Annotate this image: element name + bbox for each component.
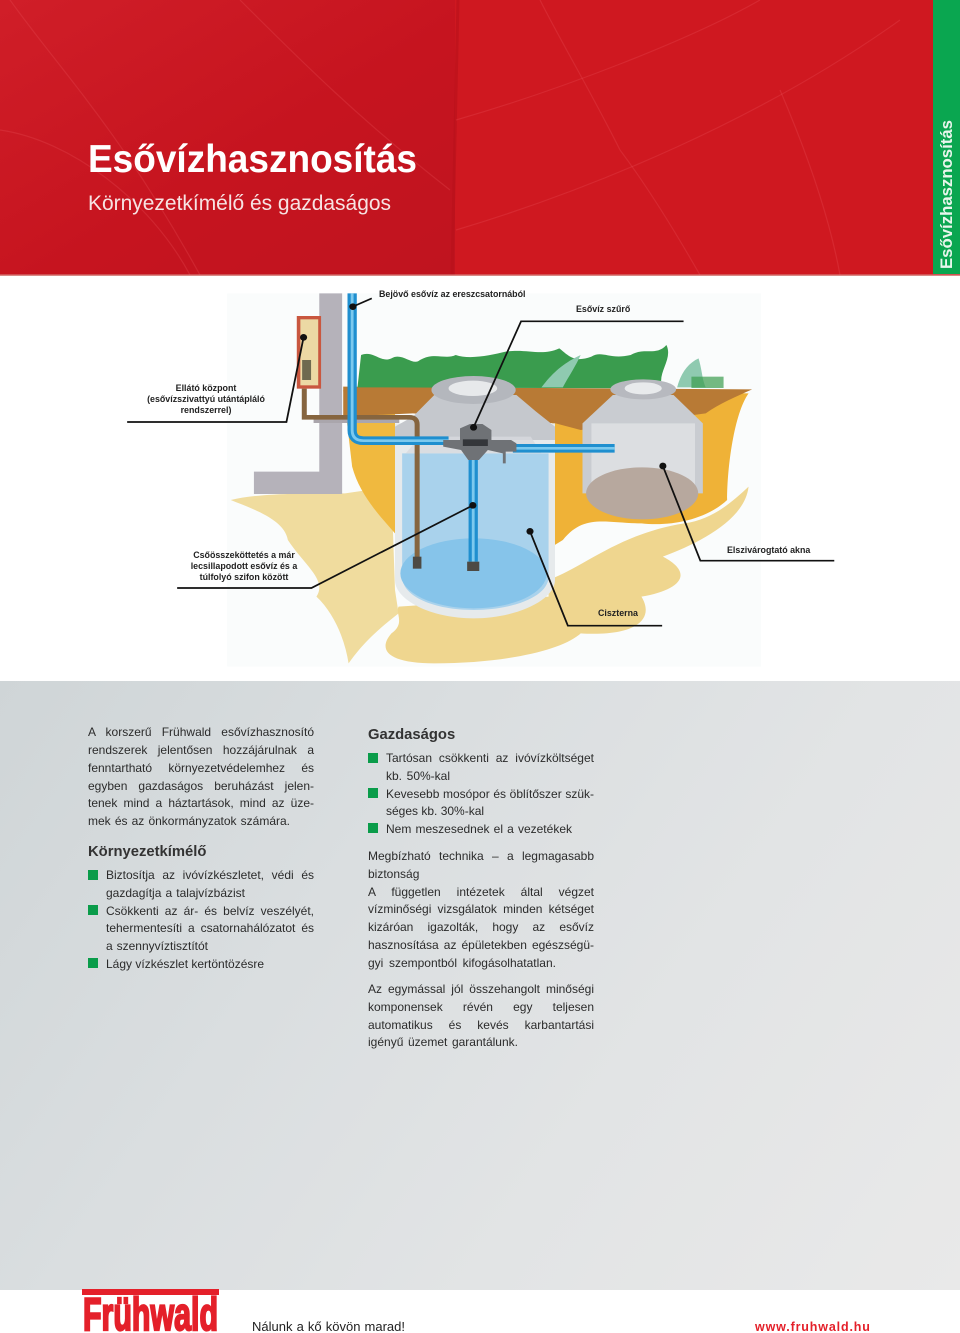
- paragraph: reliable technology: A független intézetek által végzet: [368, 885, 594, 899]
- heading: environment friendly: Környezetkímélő: [88, 844, 206, 860]
- orange soil: [343, 390, 395, 533]
- paragraph: maintenance: igényű üzemet garantálunk.: [368, 1035, 518, 1049]
- paragraph: maintenance: [368, 982, 594, 1049]
- bullet list: environment friendly: Lágy vízkészlet kertöntözésre: [106, 957, 264, 971]
- paragraph: reliable technology: biztonság: [368, 867, 419, 881]
- paragraph: reliable technology: hasznosítása az épületekben egészségü-: [368, 938, 594, 952]
- label: pipe connection: [191, 550, 298, 582]
- paragraph: reliable technology: kizáróan igazolták, hogy az esővíz: [368, 920, 594, 934]
- paragraph: maintenance: komponensek révén egy teljesen: [368, 1000, 594, 1014]
- grey text panel background: [0, 681, 960, 1290]
- sand: [231, 487, 399, 663]
- subtitle: Környezetkímélő és gazdaságos: [88, 192, 391, 215]
- label: supply centre: rendszerrel): [181, 405, 231, 415]
- paragraph: reliable technology: vízminőségi vizsgálatok minden kétséget: [368, 902, 594, 916]
- bullet list: environment friendly: Biztosítja az ivóvízkészletet, védi és: [106, 868, 314, 882]
- bullet list: economical: Tartósan csökkenti az ivóvízköltséget: [386, 751, 594, 765]
- heading: economical: Gazdaságos: [368, 727, 455, 743]
- title: Esővízhasznosítás: [88, 138, 417, 181]
- supply control box: [297, 316, 321, 389]
- intro paragraph: tenek mind a háztartások, mind az üze-: [88, 796, 314, 810]
- bullet list: environment friendly: a szennyvíztisztítót: [106, 939, 208, 953]
- intro paragraph: [88, 725, 314, 828]
- label: supply centre: (esővízszivattyú utántápláló: [147, 394, 265, 404]
- bullet list: economical: Nem meszesednek el a vezetékek: [386, 822, 572, 836]
- blue rainwater pipes: [352, 293, 615, 562]
- rain tank: [395, 376, 555, 618]
- paragraph: reliable technology: [368, 849, 594, 970]
- bullet list: environment friendly: Csökkenti az ár- és belvíz veszélyét,: [106, 904, 314, 918]
- building wall: [254, 293, 342, 494]
- label: pipe connection: túlfolyó szifon között: [200, 572, 288, 582]
- bullet list: environment friendly: gazdagítja a talajvízbázist: [106, 886, 245, 900]
- paragraph: reliable technology: Megbízható technika – a legmagasabb: [368, 849, 594, 863]
- paragraph: maintenance: Az egymással jól összehangolt minőségi: [368, 982, 594, 996]
- text column: right: [368, 727, 594, 1049]
- side tab: green strip with rotated title: Esővízhasznosítás: [938, 120, 956, 269]
- label: infiltration shaft: Elszivárogtató akna: [727, 545, 810, 555]
- text column: left: [88, 725, 314, 971]
- diagram background: [227, 293, 761, 667]
- diagram: rainwater cistern system: [127, 293, 834, 664]
- label: incoming rainwater: Bejövő esővíz az ereszcsatornából: [379, 289, 526, 299]
- label: rain filter: Esővíz szűrő: [576, 304, 630, 314]
- rain filter: [443, 424, 516, 463]
- bullet list: economical: séges kb. 30%-kal: [386, 804, 484, 818]
- side tab: green strip with rotated title: [933, 0, 960, 274]
- bullet list: economical: kb. 50%-kal: [386, 769, 450, 783]
- infiltration shaft: [582, 379, 703, 519]
- paragraph: reliable technology: gyi szempontból kifogásolhatatlan.: [368, 956, 556, 970]
- bullet list: environment friendly: tehermentesíti a csatornahálózatot és: [106, 921, 314, 935]
- label: supply centre: [147, 383, 265, 415]
- paragraph: maintenance: automatikus és kevés karbantartási: [368, 1018, 594, 1032]
- label: cistern: Ciszterna: [598, 608, 638, 618]
- plants: [357, 345, 668, 388]
- bullet list: economical: Kevesebb mosópor és öblítőszer szük-: [386, 787, 594, 801]
- intro paragraph: mek és az önkormányzatok számára.: [88, 814, 290, 828]
- label: supply centre: Ellátó központ: [176, 383, 236, 393]
- intro paragraph: A korszerű Frühwald esővízhasznosító: [88, 725, 314, 739]
- label: pipe connection: lecsillapodott esővíz és a: [191, 561, 297, 571]
- leader lines: [127, 298, 834, 626]
- bullet list: economical: [368, 751, 594, 836]
- brown overflow pipe: [304, 389, 417, 560]
- header band: red leaf background: [0, 0, 960, 276]
- intro paragraph: egyben gazdaságos beruházást jelen-: [88, 779, 314, 793]
- bullet list: environment friendly: [88, 868, 314, 971]
- label: pipe connection: Csőösszeköttetés a már: [193, 550, 295, 560]
- intro paragraph: rendszerek jelentősen hozzájárulnak a: [88, 743, 314, 757]
- intro paragraph: fenntartható környezetvédelemhez és: [88, 761, 314, 775]
